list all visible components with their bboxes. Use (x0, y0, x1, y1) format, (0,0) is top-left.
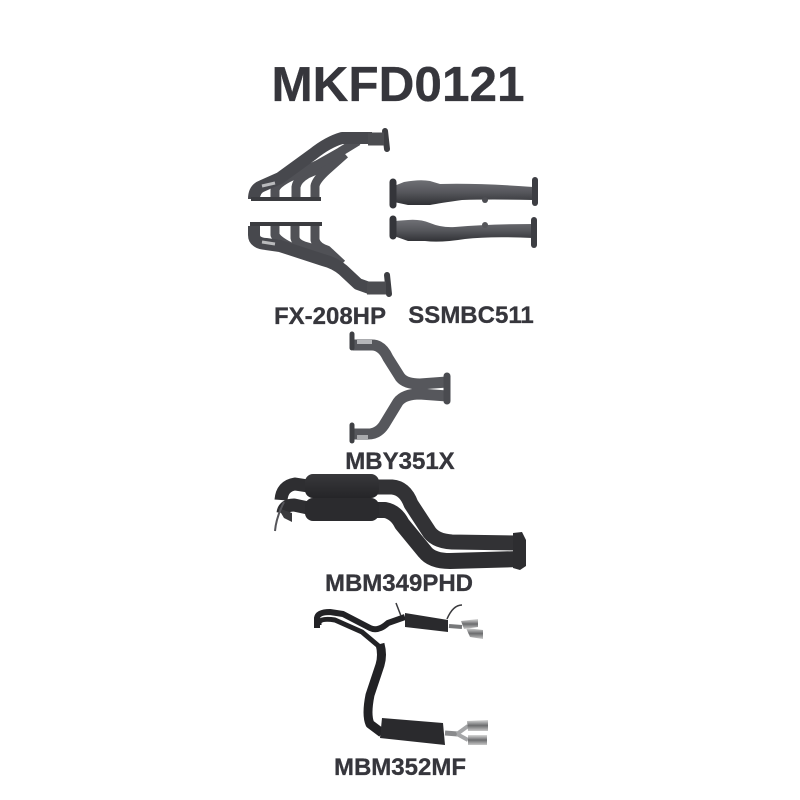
upper muffler (305, 474, 379, 498)
lower header (250, 223, 389, 294)
upper muffler (405, 613, 448, 632)
outlet flange (513, 532, 526, 570)
label: MBM349PHD: MBM349PHD (325, 570, 473, 597)
lower tips (445, 720, 488, 745)
upper cat pipe (393, 180, 535, 205)
mounting flange (278, 508, 292, 522)
hangers (396, 603, 462, 619)
label: FX-208HP: FX-208HP (274, 303, 386, 330)
title: MKFD0121 (271, 57, 525, 112)
hanger (275, 502, 284, 531)
upper tips (449, 619, 483, 639)
part: FX-208HP headers (250, 131, 389, 294)
part: SSMBC511 cat pipes (393, 180, 535, 245)
part: MBM349PHD pipes (275, 474, 526, 570)
upper header (251, 131, 387, 199)
label: SSMBC511: SSMBC511 (408, 302, 534, 329)
lower muffler (380, 718, 445, 745)
part: MBY351X Y-pipe (352, 334, 447, 441)
lower muffler (305, 498, 379, 521)
lower cat pipe (393, 219, 534, 245)
label: MBM352MF: MBM352MF (334, 754, 466, 781)
label: MBY351X: MBY351X (345, 448, 455, 475)
part: MBM352MF cat-back (317, 603, 488, 745)
